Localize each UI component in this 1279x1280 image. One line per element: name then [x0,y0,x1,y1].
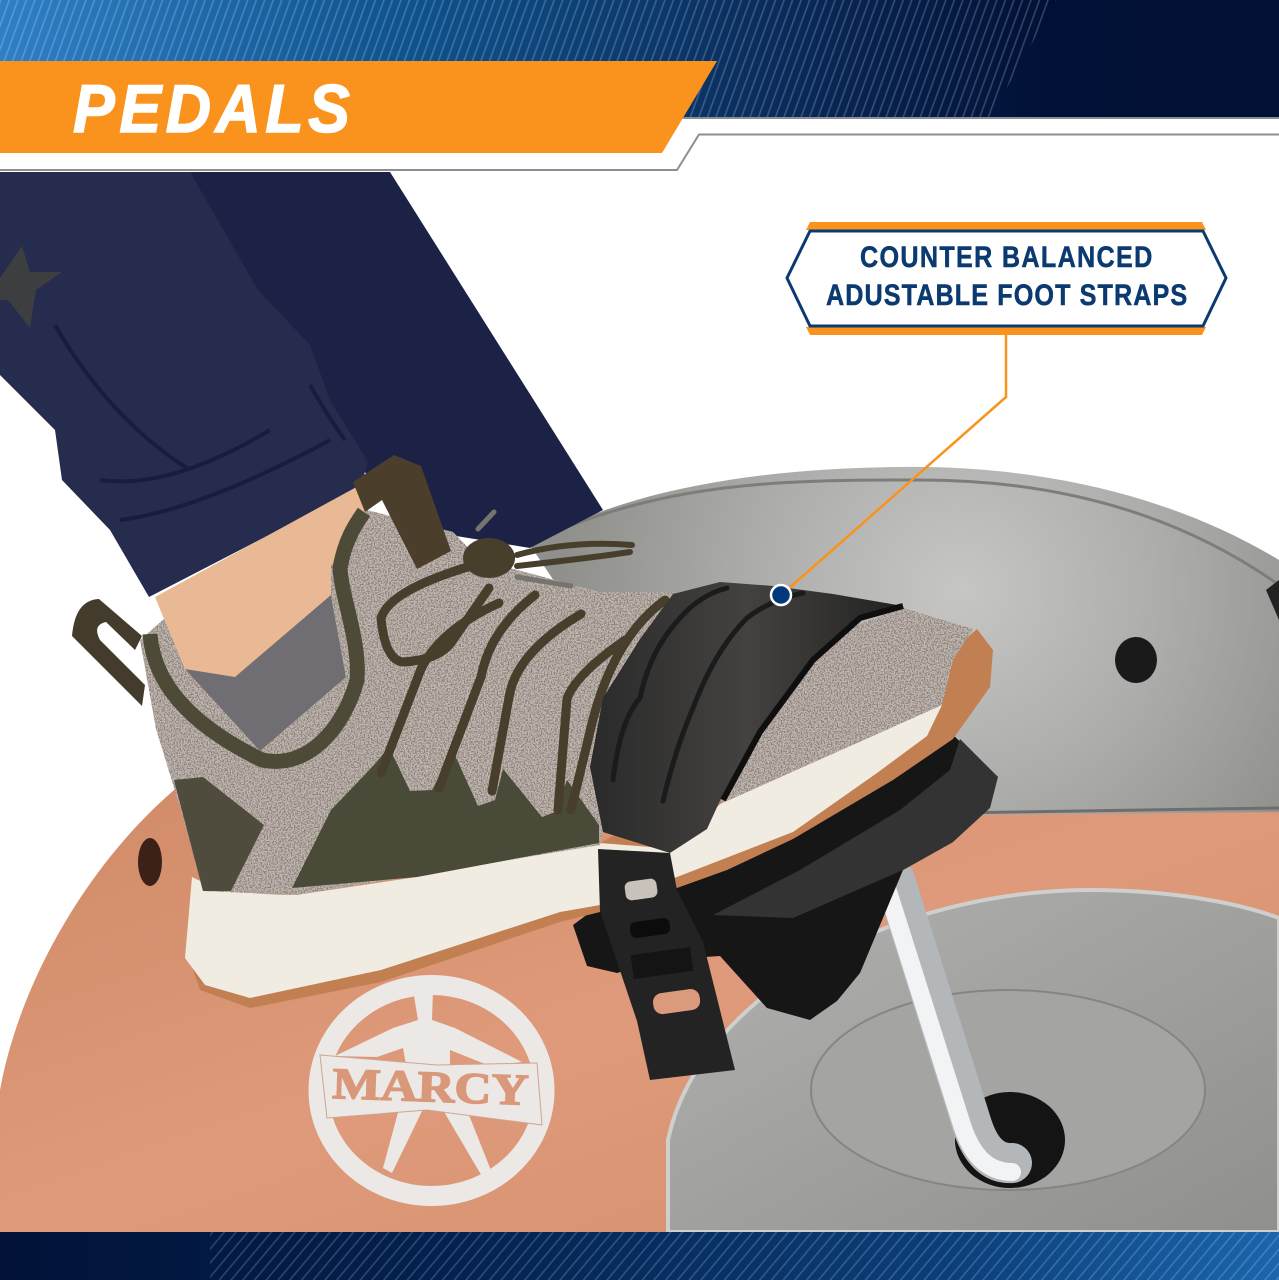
callout box [787,222,1226,335]
star print on leggings [0,246,62,328]
ankle skin [155,484,367,680]
shoe sole [185,629,993,1008]
leggings: front leg [0,172,368,597]
bike silver crank disc [668,890,1279,1232]
chrome crank arm [886,880,1012,1172]
callout text line two: ADUSTABLE FOOT STRAPS [826,278,1187,311]
shoe olive leather trim [72,455,599,891]
callout dot [771,585,791,605]
bike silver dome cover [530,467,1279,830]
shoe laces [381,512,665,810]
leggings: back leg [190,172,603,548]
tongue pull loop [353,455,451,569]
heel pull loop [72,599,145,706]
pedal toe strap [590,582,903,1080]
side panel with eyelet zigzag [292,747,599,888]
lace knot [463,538,515,578]
logo wordmark: MARCY [332,1059,529,1115]
callout connector line [787,335,1006,590]
callout text line one: COUNTER BALANCED [860,240,1152,273]
title banner [0,61,717,153]
strap lower adjuster [598,849,735,1080]
pedal platform and underside [573,735,998,1020]
bottom band [0,1232,1279,1280]
Marcy logo [318,985,544,1196]
header band [0,0,1279,170]
heel patch [174,777,264,891]
sock [185,595,346,751]
bike copper flywheel housing [0,785,1279,1232]
shoe knit upper [140,510,973,895]
title text: PEDALS [73,71,350,147]
heel collar [150,512,364,761]
